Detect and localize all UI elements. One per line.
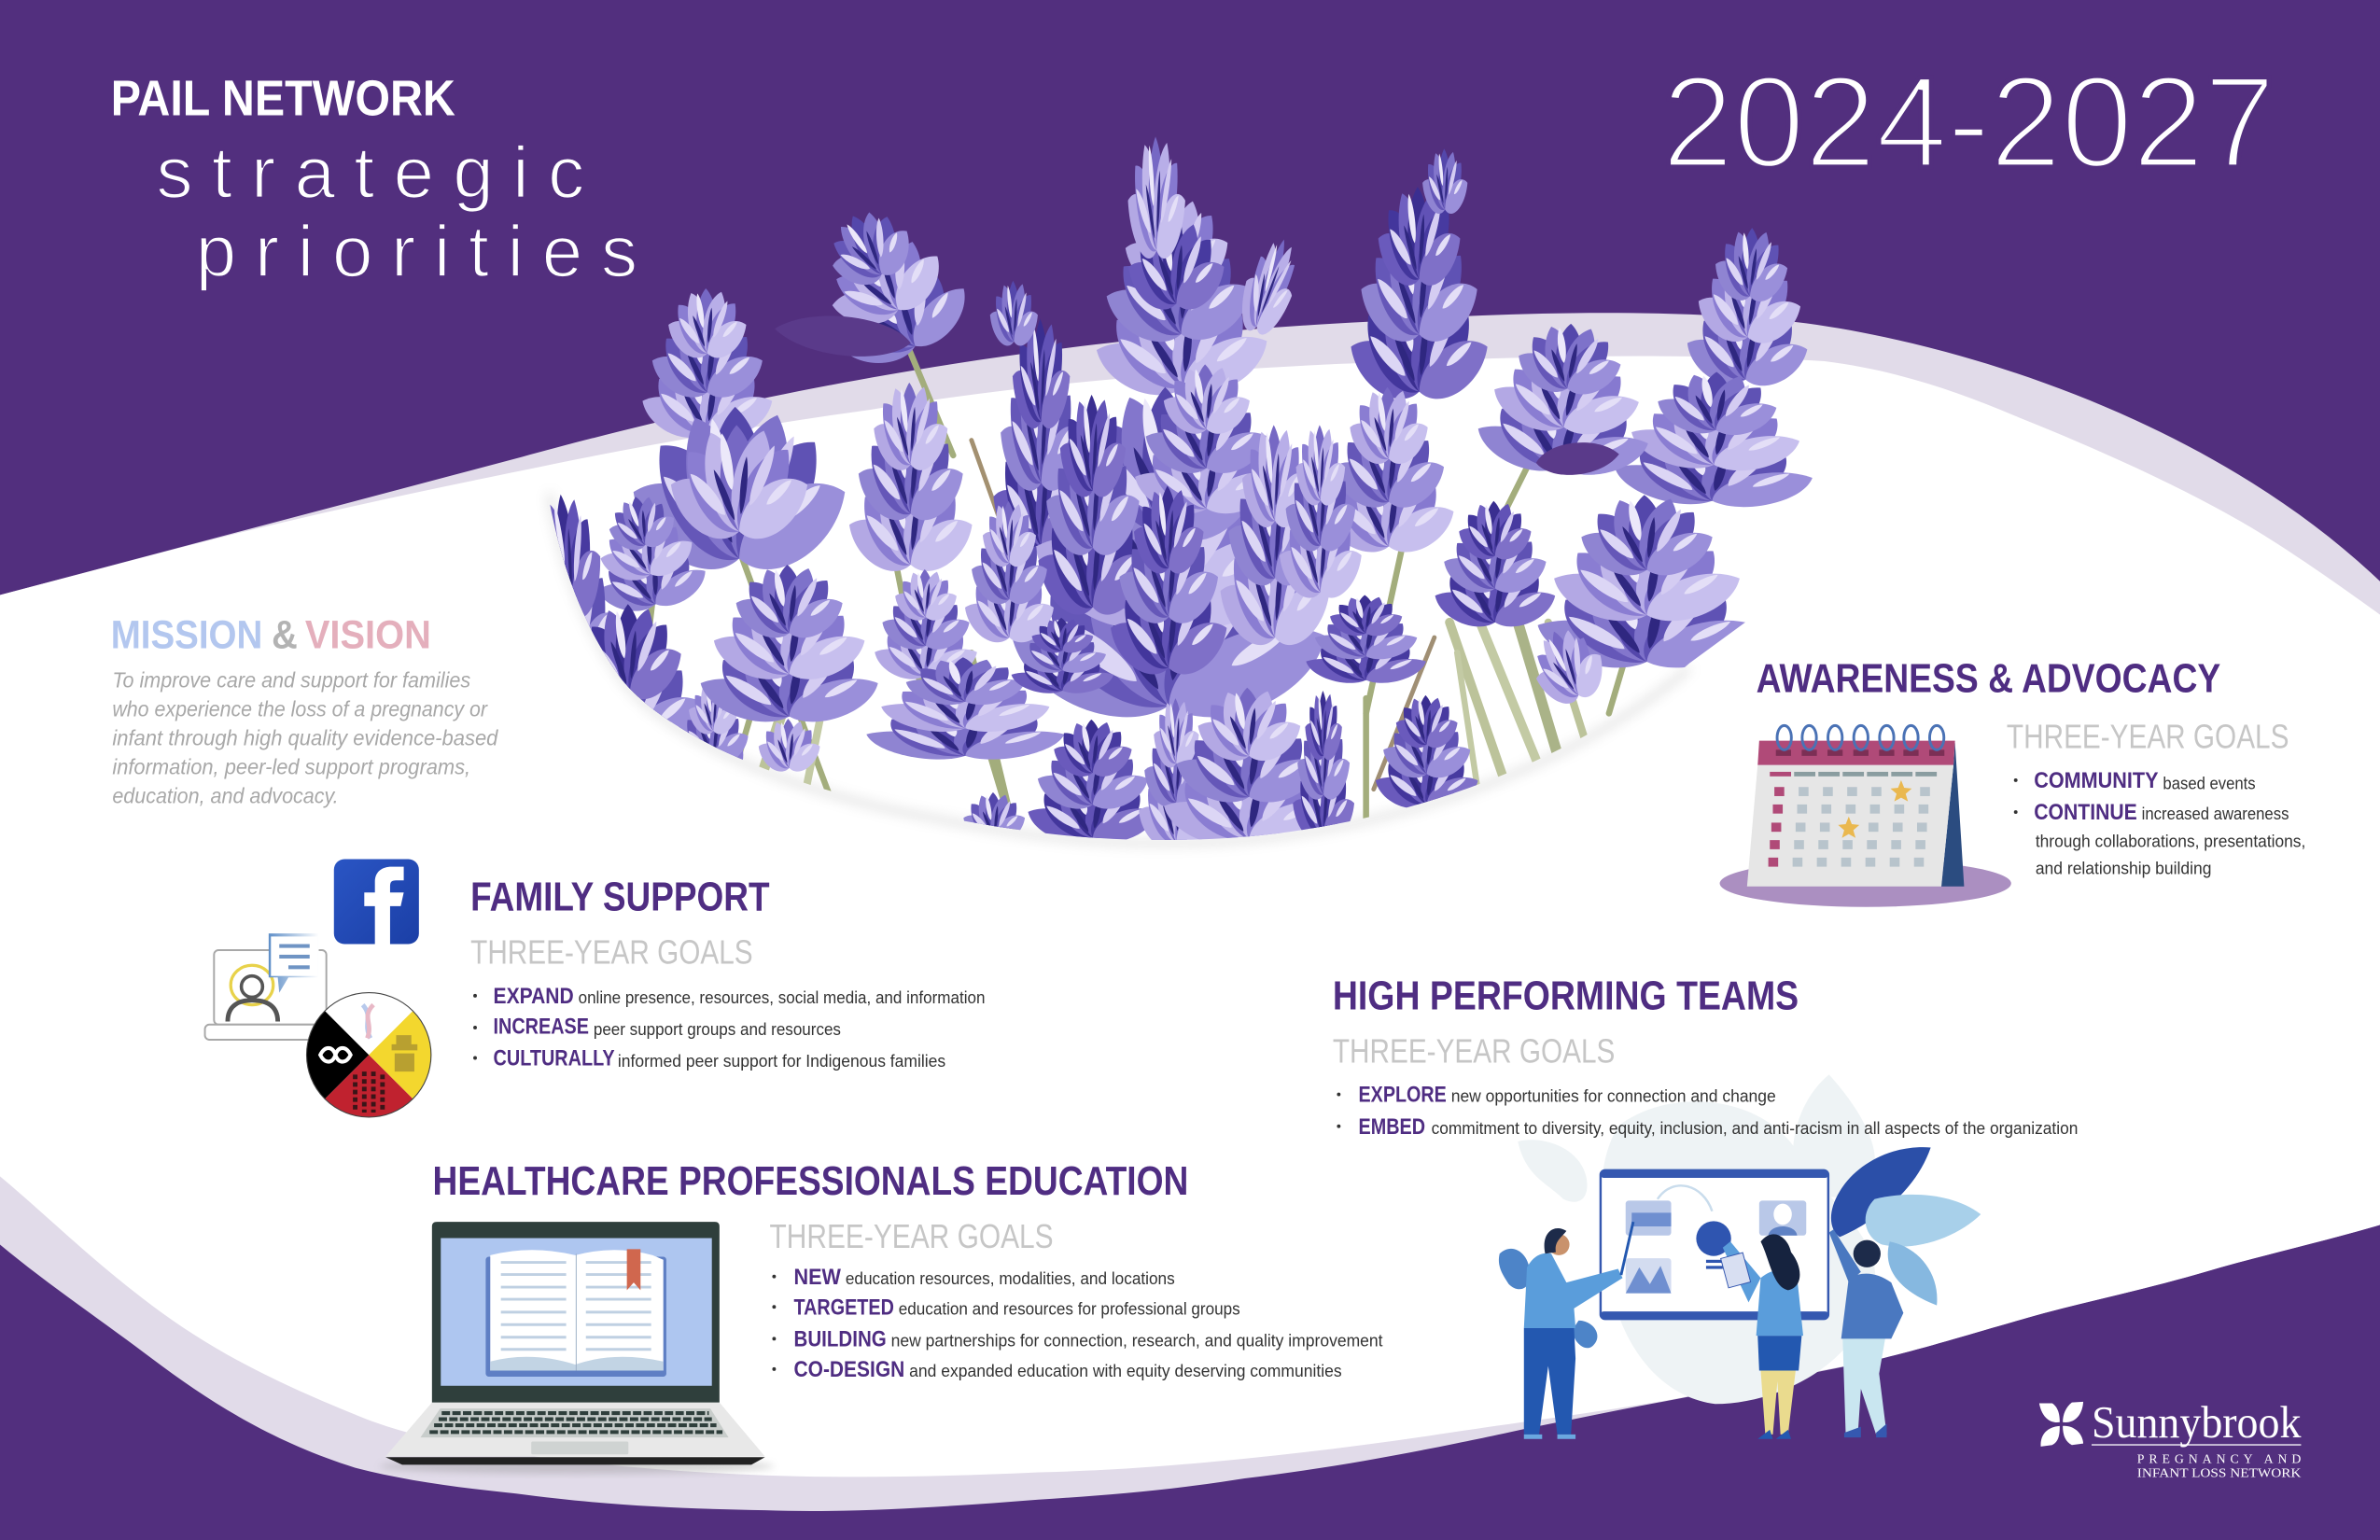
mission and vision heading: MISSION <box>111 612 262 656</box>
soft shadow under the flower circle <box>550 494 1689 843</box>
stems <box>637 346 1670 850</box>
goals list: TARGETED <box>794 1295 894 1319</box>
panel: healthcare professionals education <box>380 1158 1383 1474</box>
goals list: new opportunities for connection and change <box>1451 1086 1776 1106</box>
mission and vision heading <box>111 612 431 656</box>
goals list: online presence, resources, social media, and information <box>579 987 985 1007</box>
logo: Sunnybrook: INFANT LOSS NETWORK <box>2137 1465 2301 1479</box>
goals list <box>772 1265 1383 1381</box>
goals list: new partnerships for connection, research, and quality improvement <box>891 1330 1383 1350</box>
mission statement: who experience the loss of a pregnancy or <box>112 697 488 721</box>
icon: laptop with open book <box>380 1222 774 1474</box>
panel: high performing teams <box>1333 973 2078 1139</box>
goals list: EXPAND <box>494 984 574 1008</box>
mission and vision heading: & <box>272 612 298 656</box>
mission and vision heading: VISION <box>305 612 431 656</box>
lilac band behind the white wave <box>0 313 2380 1511</box>
goals list: BUILDING <box>794 1326 887 1351</box>
person: presenter <box>1524 1222 1633 1439</box>
goals list: based events <box>2163 774 2256 793</box>
mission statement: information, peer-led support programs, <box>112 754 470 778</box>
title: strategic priorities: strategic <box>157 131 584 213</box>
goals list: CO-DESIGN <box>794 1357 904 1381</box>
heading: FAMILY SUPPORT <box>470 875 770 920</box>
goals list: education and resources for professional groups <box>899 1298 1240 1318</box>
title: PAIL network: PAIL NETWORK <box>111 71 455 127</box>
panel: awareness and advocacy <box>1720 656 2305 907</box>
icon: laptop with person <box>205 933 327 1040</box>
goals list: EXPLORE <box>1359 1083 1447 1107</box>
flower spikes <box>833 213 965 363</box>
title: strategic priorities <box>157 131 637 292</box>
logo: Sunnybrook <box>2039 1397 2302 1479</box>
goals list: peer support groups and resources <box>594 1019 841 1039</box>
goals list: increased awareness <box>2142 804 2289 823</box>
goals list: commitment to diversity, equity, inclusion, and anti-racism in all aspects of the organization <box>1432 1118 2078 1138</box>
icon: medicine wheel <box>306 993 431 1117</box>
network name: PREGNANCY AND <box>2137 1452 2301 1466</box>
goals list <box>473 984 985 1071</box>
panel: family support icons <box>205 859 431 1117</box>
title: years: 2024-2027 <box>1662 49 2275 195</box>
subheading: THREE-YEAR GOALS <box>470 934 753 972</box>
goals list: and expanded education with equity deserving communities <box>909 1361 1342 1380</box>
icon: facebook <box>334 859 419 945</box>
mission statement: infant through high quality evidence-based <box>112 725 499 749</box>
goals list: informed peer support for Indigenous families <box>618 1051 945 1071</box>
subheading: THREE-YEAR GOALS <box>1333 1032 1615 1070</box>
mission statement <box>112 668 499 807</box>
heading: HIGH PERFORMING TEAMS <box>1333 973 1799 1018</box>
goals list: through collaborations, presentations, <box>2036 831 2305 850</box>
white wave panel <box>0 357 2380 1477</box>
heading: AWARENESS & ADVOCACY <box>1757 656 2220 702</box>
goals list: COMMUNITY <box>2034 768 2159 792</box>
goals list <box>2014 768 2305 878</box>
subheading: THREE-YEAR GOALS <box>770 1218 1054 1255</box>
goals list: NEW <box>794 1265 842 1289</box>
pale background shapes <box>1518 1074 1875 1404</box>
person: man reaching <box>1829 1229 1903 1437</box>
goals list <box>1337 1083 2078 1139</box>
heading: HEALTHCARE PROFESSIONALS EDUCATION <box>432 1158 1188 1204</box>
lavender bouquet illustration <box>501 134 1829 858</box>
goals list: CONTINUE <box>2034 800 2137 824</box>
wordmark: Sunnybrook <box>2092 1397 2302 1448</box>
leaves <box>1831 1147 1931 1237</box>
title: strategic priorities: priorities <box>196 210 637 292</box>
icon: leaves <box>2039 1402 2083 1447</box>
subheading: THREE-YEAR GOALS <box>2007 719 2289 756</box>
goals list: education resources, modalities, and locations <box>846 1268 1175 1288</box>
whiteboard <box>1601 1170 1828 1319</box>
icon: calendar <box>1720 725 2011 907</box>
person: woman with clipboard <box>1721 1234 1803 1439</box>
mission statement: To improve care and support for families <box>112 668 470 693</box>
goals list: and relationship building <box>2036 859 2211 878</box>
illustration: team at whiteboard <box>1499 1074 1981 1439</box>
mission statement: education, and advocacy. <box>112 783 339 807</box>
goals list: CULTURALLY <box>494 1046 615 1071</box>
panel: family support <box>470 875 985 1071</box>
goals list: EMBED <box>1359 1114 1425 1139</box>
goals list: INCREASE <box>494 1014 589 1038</box>
mission and vision text block <box>111 612 499 807</box>
